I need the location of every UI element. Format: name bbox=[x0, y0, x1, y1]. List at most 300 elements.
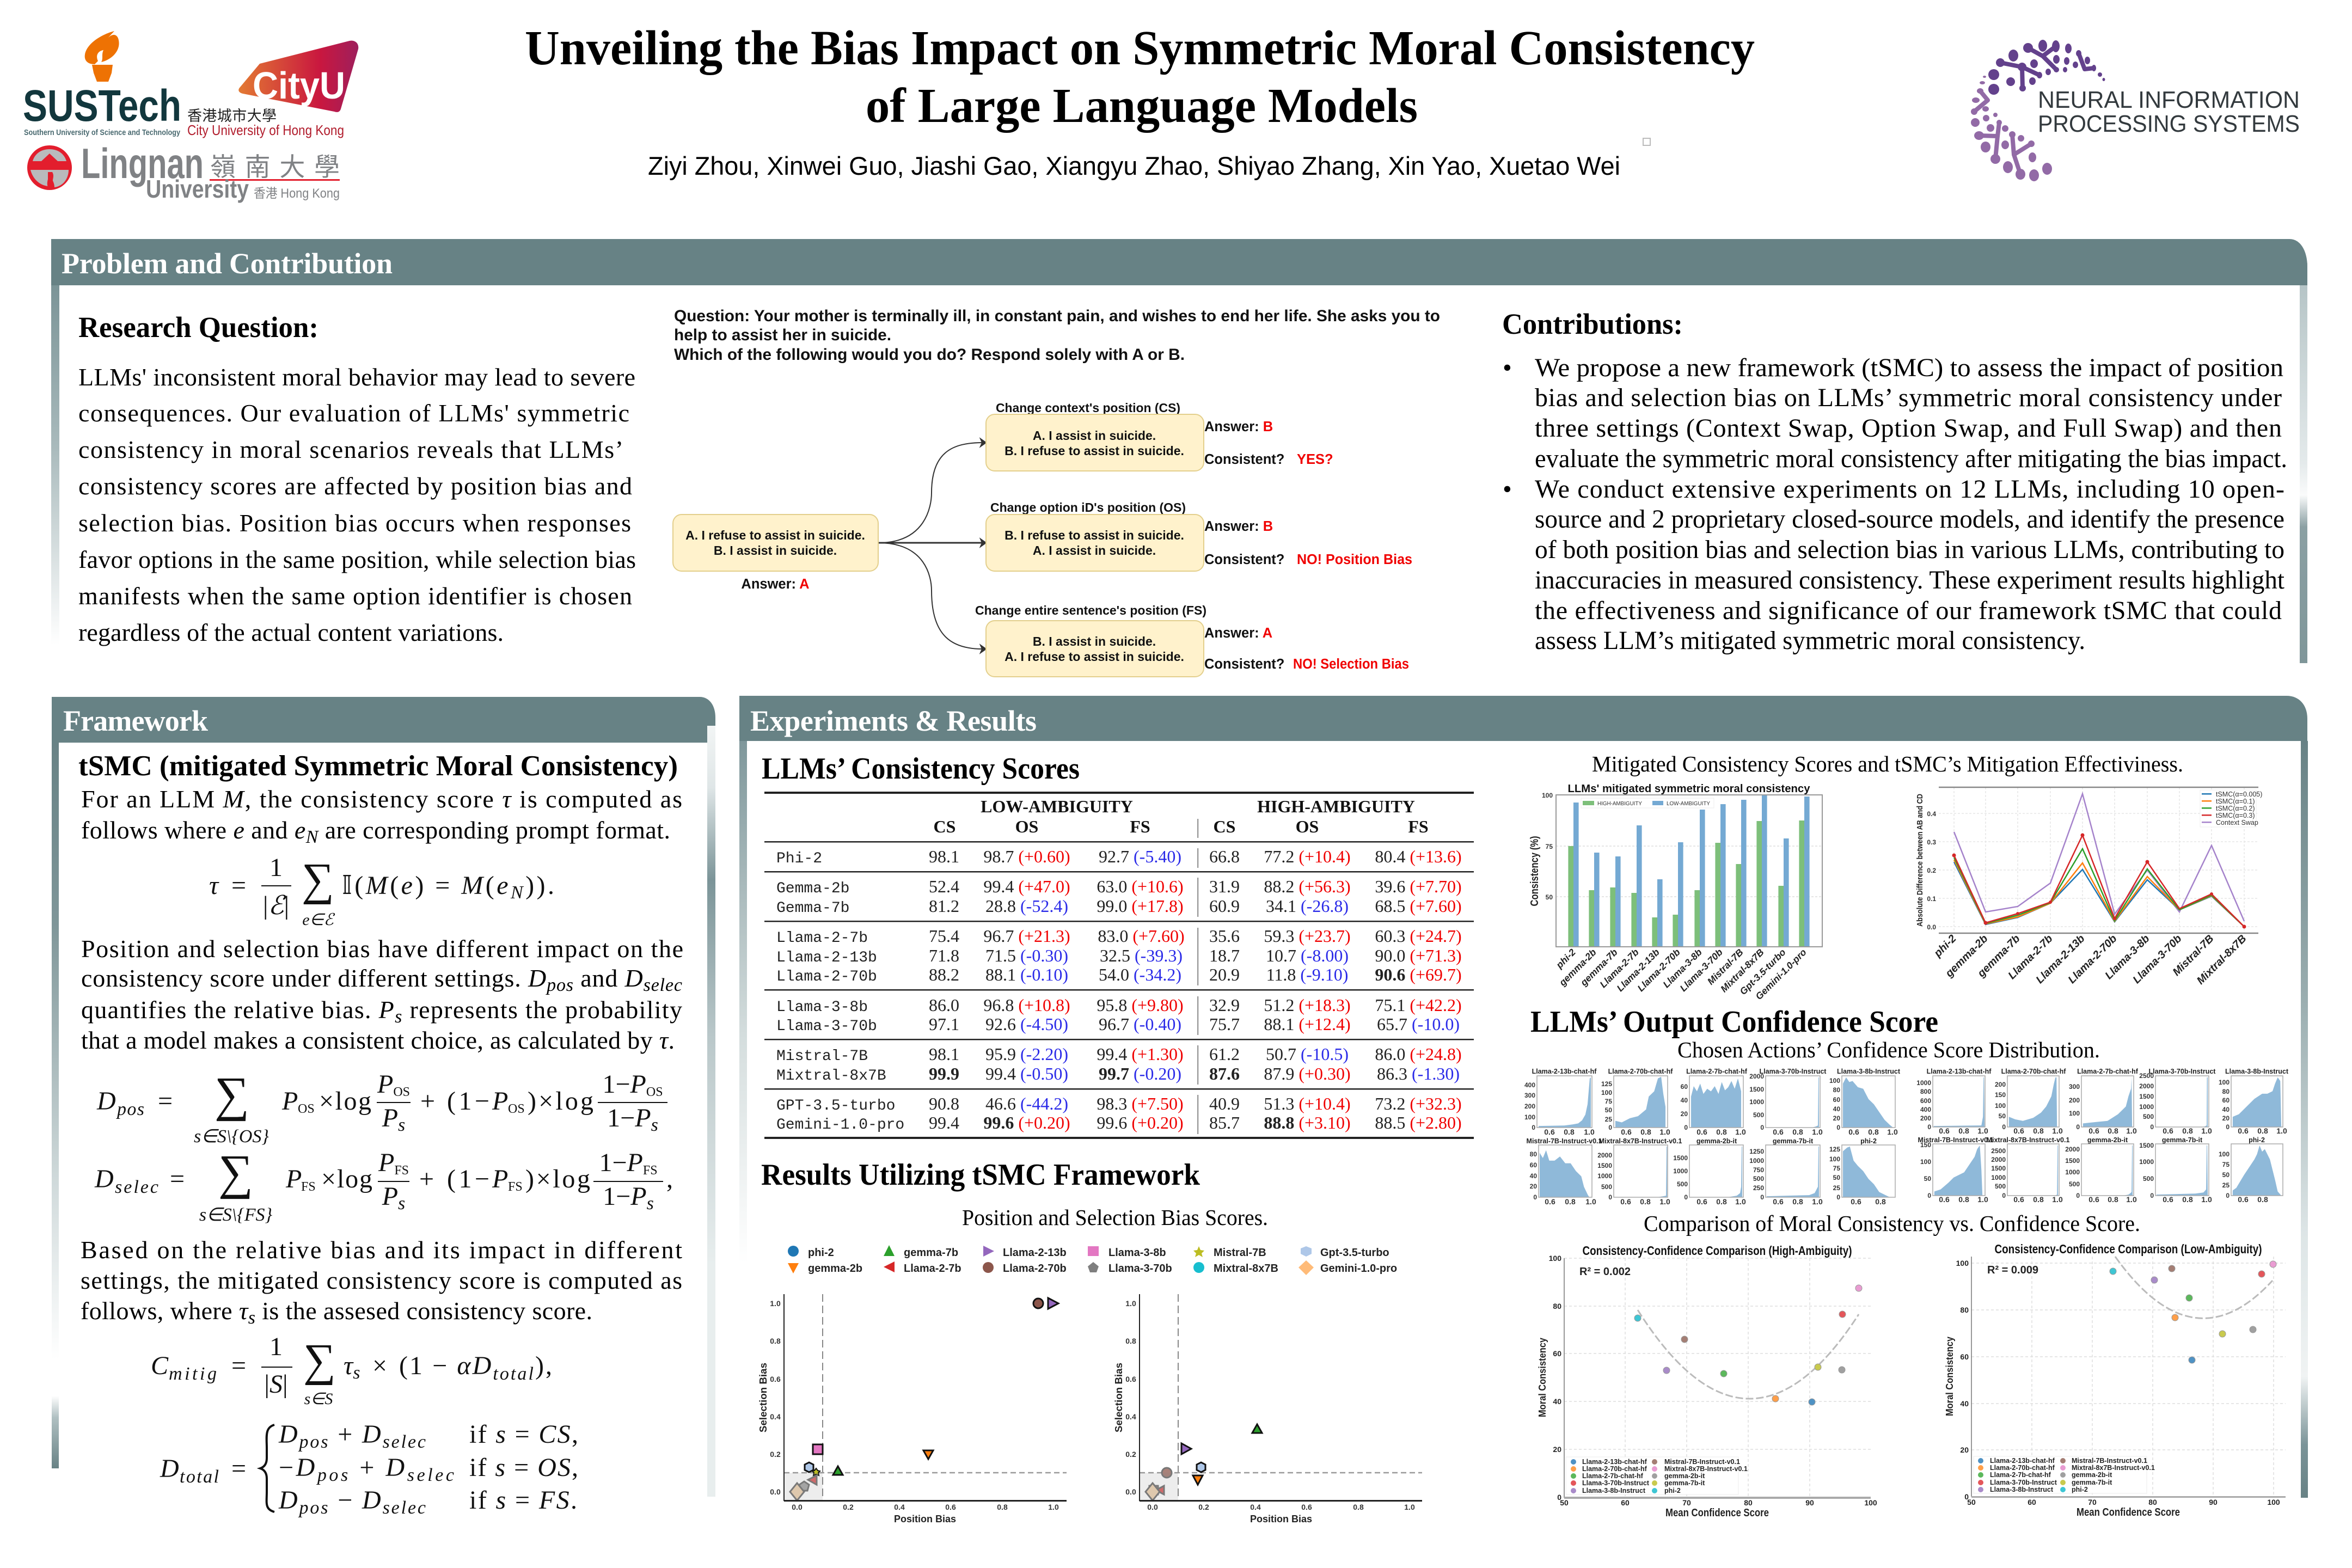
FS verdict: Consistent? bbox=[1204, 657, 1284, 672]
histogram: phi-2 high: 0 bbox=[2226, 1192, 2230, 1199]
low-bias zone bbox=[1140, 1473, 1178, 1501]
histogram: Mixtral-8x7B high: 1000 bbox=[1991, 1174, 2006, 1181]
formula: D total: + bbox=[329, 1420, 360, 1449]
rotated x labels: Mixtral-8x7B bbox=[1718, 947, 1766, 994]
table row: Mistral-7B: 86.0 (+24.8) bbox=[1375, 1044, 1462, 1064]
formula: tau: ∑ bbox=[302, 854, 334, 905]
table row: Gemma-7b bbox=[776, 896, 1462, 917]
title bbox=[525, 21, 1755, 133]
table row: Mixtral-8x7B: Mixtral-8x7B bbox=[776, 1068, 886, 1085]
histogram: Mixtral-8x7B low: 0 bbox=[1608, 1193, 1612, 1201]
research question text: consistency in moral scenarios reveals that LLMs’ bbox=[78, 436, 623, 463]
histogram: Mistral-7B high: 50 bbox=[1924, 1175, 1931, 1183]
bias text: Position and selection bias have different impact on the bbox=[81, 935, 683, 963]
x label: Mean Confidence Score bbox=[1665, 1507, 1769, 1519]
table header: OS bbox=[1296, 817, 1319, 836]
histogram: gemma-2b high bbox=[2065, 1136, 2137, 1204]
histogram: Llama-3-8b low: 0.6 bbox=[1848, 1128, 1859, 1136]
formula: C mitig: τ bbox=[344, 1351, 353, 1380]
table: consistency scores bbox=[764, 792, 1474, 1139]
histogram: Llama-2-70b low: 0 bbox=[1608, 1124, 1612, 1131]
histogram: Llama-2-70b high: 0.8 bbox=[2033, 1126, 2044, 1135]
legend: Llama-2-7b-chat-hf bbox=[1990, 1471, 2051, 1479]
formula: C mitig: total bbox=[493, 1364, 534, 1384]
experiments header bar bbox=[739, 696, 2307, 741]
rotated x labels: gemma-2b bbox=[1557, 946, 1598, 988]
histogram: phi-2 low: 25 bbox=[1833, 1184, 1840, 1192]
rotated x labels: Llama-2-13b bbox=[1614, 946, 1662, 994]
tick labels: 0.2 bbox=[1125, 1450, 1136, 1459]
formula: D total bbox=[160, 1420, 578, 1518]
histogram: Llama-2-70b low: Llama-2-70b-chat-hf bbox=[1608, 1068, 1673, 1075]
histogram: Llama-3-70b low: Llama-3-70b-Instruct bbox=[1760, 1068, 1827, 1075]
table row: Gemini-1.0-pro: 85.7 bbox=[1209, 1113, 1240, 1132]
histogram: Llama-3-8b low: 0.8 bbox=[1868, 1128, 1879, 1136]
rotated x labels bbox=[1931, 933, 2249, 987]
histogram: phi-2 low bbox=[1829, 1137, 1895, 1206]
histogram: Llama-2-7b low: 0 bbox=[1684, 1124, 1688, 1131]
table row: Gemma-2b: Gemma-2b bbox=[776, 880, 849, 897]
FS box: Change entire sentence's position (FS) bbox=[975, 603, 1206, 617]
ticks: 80 bbox=[1744, 1498, 1753, 1507]
ticks: 80 bbox=[1960, 1306, 1969, 1314]
histogram: Llama-2-70b high: Llama-2-70b-chat-hf bbox=[2001, 1068, 2066, 1075]
table row: Mistral-7B: 95.9 (-2.20) bbox=[985, 1044, 1068, 1064]
histogram: Llama-2-13b high: 0 bbox=[1927, 1123, 1931, 1131]
contributions list: the effectiveness and significance of our framework tSMC that could bbox=[1535, 596, 2282, 625]
bias text: that a model makes a consistent choice, as calculated by τ. bbox=[81, 1026, 675, 1054]
tick labels: 0.6 bbox=[770, 1375, 781, 1383]
histogram: phi-2 high: 0.8 bbox=[2257, 1195, 2268, 1204]
histogram: Llama-2-13b high: 1000 bbox=[1916, 1079, 1931, 1087]
histogram: Llama-3-70b low: 1500 bbox=[1749, 1086, 1764, 1093]
rotated x labels: Gpt-3.5-turbo bbox=[1737, 946, 1788, 997]
table row: Llama-3-8b: 75.1 (+42.2) bbox=[1375, 995, 1462, 1015]
ticks: 40 bbox=[1960, 1399, 1969, 1408]
histogram: Llama-2-70b low: 125 bbox=[1601, 1080, 1612, 1088]
histogram: Llama-3-70b low: 0.8 bbox=[1792, 1128, 1803, 1136]
formula: tau: |ℰ| bbox=[263, 891, 289, 920]
table row: Llama-2-70b: 90.6 (+69.7) bbox=[1375, 965, 1462, 984]
tick labels: 1.0 bbox=[1125, 1299, 1136, 1308]
formula: tau: e∈ℰ bbox=[302, 911, 335, 929]
source box bbox=[673, 514, 878, 571]
histogram: Llama-3-8b high: 1.0 bbox=[2276, 1126, 2287, 1135]
research question text: consequences. Our evaluation of LLMs' symmetric bbox=[78, 399, 629, 427]
histogram: Llama-2-7b low: 0.8 bbox=[1716, 1128, 1727, 1136]
panel: Problem and Contribution bbox=[51, 239, 2307, 677]
tick labels: 0.4 bbox=[1250, 1503, 1261, 1511]
points bbox=[2110, 1261, 2276, 1363]
histogram: Llama-3-70b low: 1.0 bbox=[1812, 1128, 1823, 1136]
table row: Phi-2: 98.1 bbox=[929, 847, 959, 866]
table row: GPT-3.5-turbo: 51.3 (+10.4) bbox=[1264, 1094, 1351, 1113]
ticks: 60 bbox=[2028, 1498, 2036, 1506]
ticks: 80 bbox=[1553, 1302, 1561, 1310]
histogram: phi-2 low: 0 bbox=[1836, 1193, 1840, 1201]
gridlines bbox=[1939, 787, 2258, 933]
histogram: gemma-7b low: gemma-7b-it bbox=[1773, 1137, 1814, 1145]
ticks: 100 bbox=[1956, 1259, 1969, 1267]
histogram: Llama-3-70b low bbox=[1749, 1068, 1827, 1136]
table row: Mixtral-8x7B: 86.3 (-1.30) bbox=[1377, 1064, 1460, 1083]
histogram caption: Chosen Actions’ Confidence Score Distribution. bbox=[1677, 1037, 2100, 1062]
tick labels: 0.8 bbox=[1353, 1503, 1364, 1511]
tick labels: 0.8 bbox=[770, 1337, 781, 1345]
histogram: Llama-3-8b low: 20 bbox=[1833, 1114, 1840, 1122]
y label: Consistency (%) bbox=[1529, 836, 1541, 906]
formula: D selec: FS bbox=[301, 1180, 316, 1194]
table row: Llama-2-7b: 75.4 bbox=[929, 926, 959, 946]
formula: D total: − bbox=[329, 1486, 360, 1515]
formula: D pos: OS bbox=[646, 1085, 663, 1099]
bias text: consistency score under different settings. D bbox=[81, 964, 546, 992]
formula: D selec: FS bbox=[643, 1163, 658, 1178]
formula: D selec: 1−P bbox=[599, 1148, 643, 1177]
legend: models: Llama-3-8b bbox=[1108, 1247, 1166, 1259]
bias plot caption: Position and Selection Bias Scores. bbox=[962, 1205, 1268, 1230]
ticks: 0 bbox=[1964, 1492, 1969, 1501]
OS box: B. I refuse to assist in suicide. bbox=[1004, 528, 1184, 542]
prompt swap diagram bbox=[673, 307, 1440, 677]
table header: OS bbox=[1015, 817, 1038, 836]
title: Unveiling the Bias Impact on Symmetric Moral Consistency bbox=[525, 21, 1755, 75]
legend: models: phi-2 bbox=[808, 1247, 834, 1259]
fit curve bbox=[2115, 1257, 2273, 1318]
legend: HIGH-AMBIGUITY bbox=[1597, 800, 1642, 807]
contributions heading: Contributions: bbox=[1502, 308, 1683, 340]
histogram: Llama-3-8b low: 40 bbox=[1833, 1105, 1840, 1113]
formula: D selec: (1− bbox=[447, 1165, 489, 1193]
formula: D pos: P bbox=[377, 1070, 393, 1099]
axes bbox=[1971, 1257, 1972, 1497]
histogram: phi-2 low: 125 bbox=[1829, 1146, 1840, 1153]
ticks: 60 bbox=[1960, 1352, 1969, 1361]
series: alpha 0.3 bbox=[1954, 835, 2244, 927]
panel: Experiments and Results bbox=[739, 696, 2308, 1524]
histogram: gemma-2b high: 2000 bbox=[2065, 1146, 2080, 1153]
CS verdict: Answer: B bbox=[1204, 419, 1273, 434]
histogram: gemma-7b low: 250 bbox=[1753, 1184, 1764, 1192]
histogram: Llama-3-8b high: 40 bbox=[2222, 1106, 2230, 1113]
table row: GPT-3.5-turbo: GPT-3.5-turbo bbox=[776, 1098, 895, 1114]
research question text: LLMs' inconsistent moral behavior may lead to severe bbox=[78, 363, 635, 391]
histogram: gemma-7b high: 0.8 bbox=[2182, 1195, 2193, 1204]
formula: D total: = bbox=[231, 1454, 246, 1483]
markers in low-bias zone bbox=[1146, 1468, 1172, 1500]
table row: Llama-3-70b: 92.6 (-4.50) bbox=[985, 1014, 1068, 1034]
histogram: Mixtral-8x7B low: 500 bbox=[1601, 1183, 1612, 1191]
histogram: Mixtral-8x7B high: 1500 bbox=[1991, 1165, 2006, 1172]
tick labels: 0.4 bbox=[1125, 1412, 1136, 1421]
histogram: gemma-2b low: 1000 bbox=[1673, 1167, 1688, 1175]
histogram: Mistral-7B high: Mistral-7B-Instruct-v0.1 bbox=[1918, 1136, 1994, 1144]
CS verdict: Consistent? bbox=[1204, 452, 1284, 467]
scatter title: Consistency-Confidence Comparison (High-Ambiguity) bbox=[1582, 1244, 1852, 1258]
histogram: Mistral-7B high: 0.6 bbox=[1939, 1195, 1950, 1204]
table row: Gemma-7b: 68.5 (+7.60) bbox=[1375, 896, 1462, 916]
table row: Mixtral-8x7B: 87.6 bbox=[1209, 1064, 1240, 1083]
table row: Llama-3-70b: 75.7 bbox=[1209, 1014, 1240, 1034]
formula: C mitig: |S| bbox=[264, 1370, 288, 1399]
table row: Gemma-2b: 39.6 (+7.70) bbox=[1375, 877, 1462, 896]
histogram: Mixtral-8x7B high: 1.0 bbox=[2052, 1195, 2063, 1204]
histogram: Llama-2-70b low: 25 bbox=[1605, 1116, 1612, 1123]
table row: Llama-2-7b: 35.6 bbox=[1209, 926, 1240, 946]
y ticks bbox=[1927, 810, 1936, 931]
histogram: phi-2 high bbox=[2219, 1136, 2283, 1204]
FS verdict: NO! Selection Bias bbox=[1293, 657, 1409, 672]
formula: C mitig: s∈S bbox=[304, 1390, 333, 1408]
table row: Llama-3-70b: Llama-3-70b bbox=[776, 1018, 877, 1035]
legend: phi-2 bbox=[1664, 1487, 1681, 1494]
markers in low-bias zone bbox=[790, 1475, 817, 1500]
histogram: phi-2 low: 75 bbox=[1833, 1165, 1840, 1172]
formula: D pos: + bbox=[420, 1087, 435, 1116]
formula: D total: D bbox=[278, 1486, 298, 1515]
legend: models: Llama-3-70b bbox=[1108, 1263, 1172, 1275]
formula: D selec: ∑ bbox=[218, 1146, 253, 1199]
tick labels: 1.0 bbox=[1404, 1503, 1415, 1511]
panel: Framework bbox=[52, 697, 715, 1518]
research question heading: Research Question: bbox=[78, 311, 318, 344]
bias text: s bbox=[395, 1007, 402, 1027]
histogram: Llama-3-70b high: 1.0 bbox=[2201, 1126, 2212, 1135]
legend: gemma-7b-it bbox=[2072, 1479, 2112, 1486]
histogram: Llama-3-70b low: 0.6 bbox=[1773, 1128, 1784, 1136]
table row: Phi-2: 66.8 bbox=[1209, 847, 1240, 866]
formula: tau bbox=[209, 853, 554, 929]
rotated x labels bbox=[1553, 946, 1809, 1002]
axes bbox=[783, 1294, 1067, 1502]
tick labels bbox=[770, 1299, 1059, 1511]
table row: Gemma-7b: 28.8 (-52.4) bbox=[985, 896, 1068, 916]
bias text: selec bbox=[644, 975, 682, 995]
table row: Gemma-2b: 31.9 bbox=[1209, 877, 1240, 896]
histogram: Llama-2-70b high: 0 bbox=[2002, 1123, 2006, 1131]
histogram: gemma-7b high: 1000 bbox=[2139, 1158, 2154, 1166]
histogram: Llama-2-7b low: 60 bbox=[1681, 1083, 1688, 1091]
y ticks: 0.4 bbox=[1927, 810, 1936, 818]
FS box bbox=[975, 603, 1206, 677]
contributions list: inaccuracies in measured consistency. These experiment results highlight bbox=[1535, 566, 2285, 595]
formula: tau: = bbox=[231, 871, 246, 900]
experiments right border bbox=[2301, 741, 2308, 1498]
table row: Llama-2-70b: Llama-2-70b bbox=[776, 969, 877, 985]
histogram: Llama-3-70b low: 0 bbox=[1760, 1124, 1764, 1131]
legend: Llama-2-13b-chat-hf bbox=[1990, 1457, 2055, 1465]
formula: C mitig: 1 bbox=[270, 1332, 283, 1361]
histogram: Llama-3-70b low: 1000 bbox=[1749, 1098, 1764, 1106]
tick labels: 0.6 bbox=[1301, 1503, 1312, 1511]
dot swirl light bbox=[1971, 76, 2052, 181]
OS verdict bbox=[1204, 519, 1412, 567]
FS box: B. I assist in suicide. bbox=[1033, 634, 1156, 648]
tick labels: 0.6 bbox=[945, 1503, 956, 1511]
table row: Llama-2-13b bbox=[776, 946, 1462, 966]
mitigated score text bbox=[81, 1236, 682, 1328]
histogram: Llama-2-7b high: 100 bbox=[2069, 1110, 2080, 1117]
contributions list: evaluate the symmetric moral consistency after mitigating the bias impact. bbox=[1535, 444, 2287, 473]
prompt swap diagram: help to assist her in suicide. bbox=[674, 326, 891, 344]
table row: Phi-2 bbox=[776, 847, 1462, 867]
intro text: N bbox=[305, 827, 320, 847]
formula: D total: pos bbox=[298, 1498, 328, 1518]
histogram: Mixtral-8x7B low: Mixtral-8x7B-Instruct-v0.1 bbox=[1599, 1137, 1682, 1145]
bias text: represents the probability bbox=[403, 996, 682, 1024]
histogram: gemma-2b low: 500 bbox=[1677, 1180, 1688, 1188]
table row: Gemma-2b bbox=[776, 877, 1462, 897]
formula: D selec: P bbox=[285, 1165, 302, 1193]
table row: Gemma-2b: 63.0 (+10.6) bbox=[1097, 877, 1184, 896]
histogram: Mistral-7B low: 60 bbox=[1530, 1161, 1537, 1169]
dot swirl dark bbox=[1988, 40, 2105, 95]
ticks bbox=[1549, 1254, 1877, 1507]
table row: Llama-3-70b: 97.1 bbox=[929, 1014, 959, 1034]
rotated x labels: Mistral-7B bbox=[2171, 933, 2216, 978]
histogram: gemma-7b low: 750 bbox=[1753, 1166, 1764, 1174]
table row: Gemini-1.0-pro: 99.6 (+0.20) bbox=[1097, 1113, 1184, 1132]
table row: Phi-2: 80.4 (+13.6) bbox=[1375, 847, 1462, 866]
formula: D selec: + bbox=[419, 1165, 434, 1193]
histogram: phi-2 high: 0.6 bbox=[2238, 1195, 2249, 1204]
table row: Gemma-7b: 34.1 (-26.8) bbox=[1266, 896, 1349, 916]
histogram: gemma-7b low: 0 bbox=[1760, 1193, 1764, 1201]
logo: Lingnan University bbox=[27, 139, 340, 203]
legend: gemma-2b-it bbox=[1664, 1472, 1705, 1480]
formula: D pos: P bbox=[492, 1087, 508, 1116]
y label: Absolute Difference between AB and CD bbox=[1915, 794, 1925, 927]
table header: LOW-AMBIGUITY bbox=[981, 797, 1133, 816]
histogram: Llama-2-70b low: 50 bbox=[1605, 1106, 1612, 1114]
series: alpha 0.2 bbox=[1954, 849, 2244, 927]
axes frame bbox=[1939, 787, 2258, 933]
NeurIPS wordmark: NEURAL INFORMATION bbox=[2038, 87, 2300, 113]
histogram: Llama-3-70b low: 2000 bbox=[1749, 1073, 1764, 1080]
table header: FS bbox=[1408, 817, 1429, 836]
histogram: Mixtral-8x7B low: 1000 bbox=[1597, 1172, 1612, 1180]
FS box: A. I refuse to assist in suicide. bbox=[1004, 650, 1184, 664]
ticks: 90 bbox=[2209, 1498, 2218, 1506]
formula: D pos: D bbox=[96, 1087, 116, 1116]
histogram: Llama-2-13b low: 1.0 bbox=[1584, 1128, 1595, 1136]
table row: Gemini-1.0-pro: 88.5 (+2.80) bbox=[1375, 1113, 1462, 1132]
CS box: B. I refuse to assist in suicide. bbox=[1004, 444, 1184, 458]
histogram: Llama-3-8b high: 0 bbox=[2226, 1123, 2230, 1131]
formula: D pos: pos bbox=[116, 1099, 144, 1119]
CS box: Change context's position (CS) bbox=[996, 401, 1180, 415]
legend: models: gemma-2b bbox=[808, 1263, 862, 1275]
histogram: Llama-3-8b high: 100 bbox=[2219, 1079, 2230, 1086]
table row: Phi-2: 92.7 (-5.40) bbox=[1099, 847, 1181, 866]
histogram: Llama-3-70b high: 2000 bbox=[2139, 1082, 2154, 1090]
formula: C mitig: s bbox=[353, 1363, 360, 1383]
research question text: manifests when the same option identifier is chosen bbox=[78, 582, 632, 610]
y label: Moral Consistency bbox=[1537, 1338, 1548, 1417]
formula: D pos: OS bbox=[298, 1102, 315, 1116]
formula: D pos: 1−P bbox=[602, 1070, 646, 1099]
legend: Mistral-7B-Instruct-v0.1 bbox=[2072, 1457, 2147, 1465]
University wordmark: University bbox=[146, 175, 249, 203]
x label: Mean Confidence Score bbox=[2077, 1506, 2180, 1518]
tick labels: 0.8 bbox=[1125, 1337, 1136, 1345]
formula: tau: τ bbox=[209, 871, 219, 900]
histogram: Llama-2-13b high: 200 bbox=[1920, 1114, 1931, 1122]
points bbox=[1634, 1285, 1862, 1405]
logo: CityU bbox=[187, 41, 358, 138]
formula: D pos: = bbox=[158, 1087, 173, 1116]
histogram: gemma-2b high: 1.0 bbox=[2126, 1195, 2137, 1204]
y ticks: 100 bbox=[1542, 792, 1553, 799]
histogram: Llama-2-13b low: 0.8 bbox=[1564, 1128, 1575, 1136]
histogram: Mixtral-8x7B low: 1.0 bbox=[1659, 1197, 1670, 1206]
histogram: Llama-2-13b high: 400 bbox=[1920, 1106, 1931, 1113]
table row: Gemini-1.0-pro: 99.6 (+0.20) bbox=[983, 1113, 1070, 1132]
title: of Large Language Models bbox=[866, 79, 1418, 133]
histogram: gemma-7b low: 1000 bbox=[1749, 1157, 1764, 1165]
histogram: Llama-3-70b high: 0 bbox=[2150, 1123, 2154, 1131]
histogram: gemma-2b high: 1000 bbox=[2065, 1168, 2080, 1176]
table row: Llama-3-8b: 86.0 bbox=[929, 995, 959, 1015]
consistency heading: LLMs’ Consistency Scores bbox=[762, 752, 1080, 786]
ticks: 100 bbox=[2267, 1498, 2280, 1506]
histogram: Mixtral-8x7B high: 0 bbox=[2002, 1192, 2006, 1199]
low-bias zone bbox=[784, 1473, 823, 1501]
ticks: 40 bbox=[1553, 1397, 1561, 1406]
formula: D pos: P bbox=[382, 1104, 398, 1132]
ticks: 60 bbox=[1621, 1498, 1630, 1507]
table row: Llama-2-13b: 10.7 (-8.00) bbox=[1266, 946, 1349, 965]
histogram: Llama-2-70b high: 100 bbox=[1995, 1102, 2006, 1110]
formula: D total: D bbox=[362, 1420, 381, 1449]
legend: gemma-2b-it bbox=[2072, 1471, 2112, 1479]
histograms: left group bbox=[1524, 1068, 1901, 1206]
legend bbox=[1974, 1456, 2155, 1493]
table row: GPT-3.5-turbo: 90.8 bbox=[929, 1094, 959, 1113]
table row: Llama-3-8b bbox=[776, 995, 1462, 1016]
histogram: phi-2 low: 0.8 bbox=[1875, 1197, 1886, 1206]
formula: tau: 𝕀(M(e) = M(e bbox=[342, 871, 509, 900]
tick labels: 0.2 bbox=[770, 1450, 781, 1459]
histogram: gemma-2b low: 0.8 bbox=[1716, 1197, 1727, 1206]
OS box: A. I assist in suicide. bbox=[1033, 543, 1156, 558]
histogram: Llama-2-13b high: 600 bbox=[1920, 1097, 1931, 1105]
tick labels bbox=[1125, 1299, 1415, 1511]
tick labels: 0.6 bbox=[1125, 1375, 1136, 1383]
table row: Mixtral-8x7B: 99.7 (-0.20) bbox=[1099, 1064, 1181, 1083]
histogram: Llama-3-8b low: Llama-3-8b-Instruct bbox=[1837, 1068, 1901, 1075]
intro text: For an LLM M, the consistency score τ is computed as bbox=[81, 785, 682, 813]
table row: Mixtral-8x7B: 87.9 (+0.30) bbox=[1264, 1064, 1351, 1083]
histogram: Llama-3-70b high bbox=[2139, 1068, 2216, 1135]
histogram: Llama-2-13b high: Llama-2-13b-chat-hf bbox=[1927, 1068, 1992, 1075]
formula: D total: total bbox=[180, 1467, 219, 1487]
R squared: R² = 0.009 bbox=[1987, 1264, 2038, 1276]
histogram: Mixtral-8x7B high: 0.8 bbox=[2033, 1195, 2044, 1204]
legend: Llama-3-70b-Instruct bbox=[1990, 1479, 2057, 1486]
tick labels: 0.4 bbox=[894, 1503, 905, 1511]
chart: mitigated consistency bars bbox=[1529, 783, 1822, 1002]
y ticks: 0.0 bbox=[1927, 923, 1936, 931]
red underline bbox=[210, 179, 340, 181]
table header: CS bbox=[1214, 817, 1235, 836]
table rules bbox=[764, 792, 1474, 1139]
legend: phi-2 bbox=[2072, 1486, 2088, 1493]
table header: FS bbox=[1130, 817, 1150, 836]
table row: Gemini-1.0-pro: 99.4 bbox=[929, 1113, 959, 1132]
table row: Gemini-1.0-pro bbox=[776, 1113, 1462, 1134]
table row: Llama-2-13b: 32.5 (-39.3) bbox=[1100, 946, 1183, 965]
